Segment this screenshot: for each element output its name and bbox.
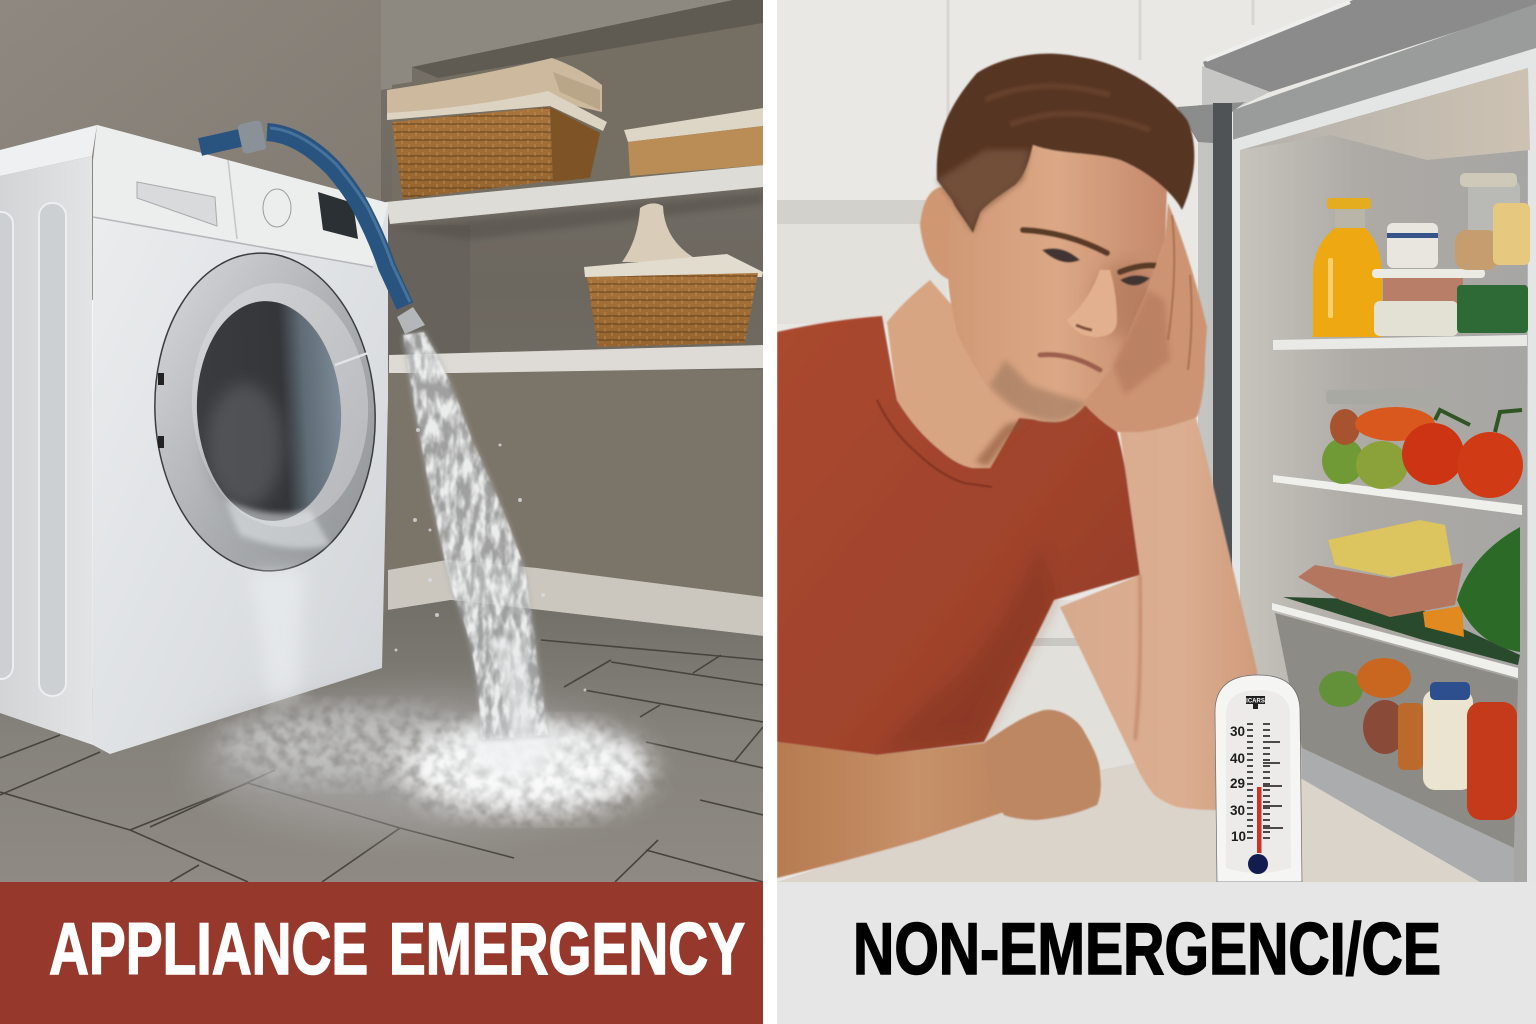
door glass water haze — [207, 383, 283, 507]
bottle — [1313, 198, 1382, 337]
fridge body — [1177, 0, 1536, 882]
panel: non-emergency photo scene — [777, 0, 1536, 882]
thermometer right ticks — [1263, 724, 1283, 838]
water stream — [403, 332, 548, 740]
stubble — [990, 360, 1087, 422]
fridge grey door band — [1233, 4, 1536, 140]
wicker basket lower shelf — [584, 203, 763, 347]
thermometer — [1215, 675, 1302, 882]
water droplets — [394, 428, 586, 692]
neck — [887, 280, 1040, 468]
thermometer top tag — [1246, 696, 1265, 709]
ear — [920, 187, 952, 280]
fridge dark column — [1213, 103, 1232, 703]
top shelf containers — [1372, 173, 1530, 336]
eye socket shadow — [1093, 262, 1157, 338]
shirt — [777, 316, 1140, 755]
fridge interior back — [1240, 68, 1528, 882]
door glass — [191, 297, 347, 525]
panel: non-emergency label band — [777, 882, 1536, 1024]
thermometer red column — [1257, 787, 1262, 853]
man — [777, 54, 1262, 878]
crisper drawer — [1275, 613, 1518, 848]
crisper front band — [1302, 748, 1514, 882]
fridge ceiling — [1242, 68, 1530, 160]
cabinet underside — [777, 200, 947, 224]
thermometer numbers: 30 — [1230, 724, 1245, 739]
fist — [984, 710, 1101, 820]
panel division — [228, 160, 237, 239]
thermometer numbers: 29 — [1230, 776, 1245, 791]
counter — [777, 763, 1480, 882]
fridge hinge — [1177, 102, 1245, 143]
door inner ring — [186, 279, 374, 531]
shirt collar stitching — [877, 400, 992, 487]
top shelf underside — [412, 0, 763, 78]
palm shadow — [1113, 290, 1170, 395]
hose nozzle — [397, 307, 425, 334]
fridge side strip — [1198, 105, 1214, 665]
basket upper right — [624, 108, 763, 176]
display — [318, 192, 358, 239]
face — [948, 145, 1167, 422]
shelving alcove wall — [381, 0, 763, 640]
thermometer numbers: 40 — [1230, 751, 1245, 766]
middle shelf — [386, 165, 763, 240]
wall behind baskets — [392, 82, 412, 88]
thermometer bulb — [1248, 854, 1268, 874]
nostril — [1076, 325, 1092, 330]
washer front — [93, 125, 388, 754]
laundry room wall — [0, 0, 381, 300]
door hinges — [158, 373, 164, 448]
hair — [937, 54, 1194, 233]
lower alcove wall shade — [388, 344, 470, 360]
panel seam — [93, 217, 373, 267]
thermometer numbers: 30 — [1230, 803, 1245, 818]
mouth — [1040, 355, 1100, 370]
door bar — [335, 353, 368, 365]
backsplash — [777, 224, 947, 324]
thermometer numbers: 10 — [1231, 829, 1246, 844]
shelf 3 — [1272, 603, 1518, 678]
panel: appliance emergency label band — [0, 882, 763, 1024]
upper wall above top shelf — [381, 0, 733, 90]
nose — [1067, 270, 1117, 337]
washer side rib — [39, 203, 66, 696]
thermometer body — [1215, 675, 1302, 882]
hand on head — [1083, 203, 1207, 432]
thermometer face — [1226, 690, 1291, 873]
vegetables middle shelf — [1322, 390, 1523, 498]
fridge white frame — [1232, 48, 1536, 882]
elbow crease — [1135, 575, 1140, 740]
soffit highlight — [1206, 2, 1350, 60]
shelf 1 — [1273, 335, 1527, 350]
panel: appliance emergency photo scene — [0, 0, 763, 882]
raised arm — [1060, 410, 1262, 810]
fridge top soffit — [1203, 0, 1536, 92]
washing machine — [0, 125, 388, 754]
control knob — [263, 189, 291, 227]
tiled floor — [0, 600, 763, 882]
lower shelf — [389, 345, 763, 373]
washer left side — [0, 156, 93, 745]
wall under lower shelf — [388, 370, 763, 418]
water across door — [225, 500, 330, 548]
hose — [200, 120, 425, 334]
thermometer top tag: ICARS — [1246, 698, 1265, 704]
detergent drawer — [137, 182, 217, 226]
shirt shadow — [880, 540, 1054, 752]
label: appliance emergency: APPLIANCE EMERGENCY — [49, 909, 745, 990]
shelf 2 — [1273, 475, 1522, 515]
washer top band — [0, 125, 97, 176]
finger lines — [1168, 215, 1192, 370]
cabinet lines — [948, 0, 1253, 205]
thermometer scale ticks — [1247, 724, 1253, 838]
cheese and deli — [1283, 520, 1520, 665]
baseboard — [388, 560, 763, 636]
drawer contents — [1319, 658, 1517, 820]
neck shadow — [975, 418, 1030, 466]
kitchen background — [777, 0, 1536, 882]
hair side fade — [937, 150, 1030, 233]
thermometer numbers — [1230, 724, 1246, 844]
washer side rib left — [0, 212, 13, 679]
door ring — [147, 247, 383, 577]
lower cabinet — [985, 600, 1145, 780]
water puddle — [195, 697, 650, 833]
fridge side cap — [1202, 66, 1270, 110]
hair highlights — [985, 86, 1150, 130]
eyebrows — [1023, 230, 1163, 272]
hose coupling — [237, 120, 267, 154]
left forearm — [777, 742, 1010, 878]
eyes — [1042, 248, 1150, 286]
control panel — [93, 125, 388, 267]
basket with folded towels — [387, 58, 607, 199]
water running down washer — [250, 570, 305, 705]
